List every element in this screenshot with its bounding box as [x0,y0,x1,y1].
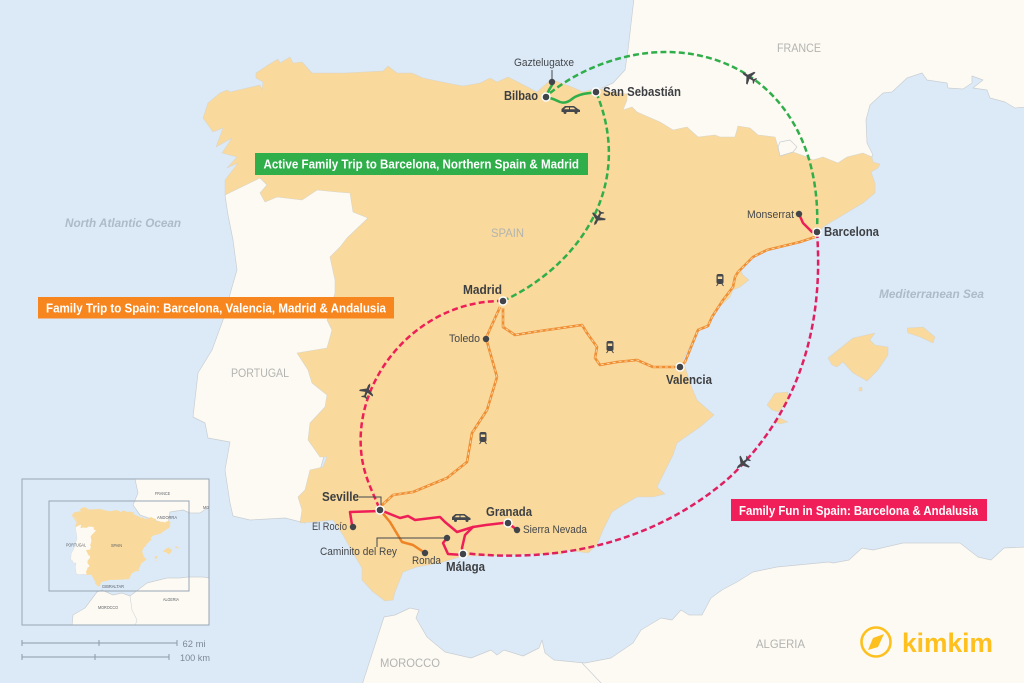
city labels: Caminito del Rey [320,546,397,558]
city labels: Valencia [666,372,713,387]
country labels [231,41,821,670]
scale bar: miles [22,639,206,649]
land: France [602,0,1024,180]
city labels: Madrid [463,282,502,297]
inset locator map [22,479,210,626]
city labels: Monserrat [747,209,794,221]
country labels: PORTUGAL [231,366,289,380]
inset locator map: FRANCE [155,491,170,496]
city labels: San Sebastián [603,84,681,99]
banner: Family Trip to Spain [38,297,394,318]
banner: Active Family Trip [255,153,588,175]
city labels: Bilbao [504,88,538,103]
city labels: Toledo [449,333,480,345]
route: green active family trip [503,52,817,301]
icon: trains [480,274,724,444]
scale bar: kilometres: 100 km [180,653,210,663]
sea label: North Atlantic Ocean: North Atlantic Ocean [65,216,181,230]
city labels: Barcelona [824,224,880,239]
inset locator map: MOROCCO [98,605,118,610]
logo: kimkim compass: kimkim [902,628,993,658]
inset locator map: ANDORRA [157,515,178,520]
scale bar: miles: 62 mi [182,639,206,649]
inset locator map: PORTUGAL [66,542,86,548]
city labels: El Rocío [312,521,347,533]
banner: Active Family Trip: Active Family Trip to Barcelona, Northern Spain & Madrid [264,156,579,172]
inset locator map: ALGERIA [163,597,180,602]
city labels: Málaga [446,559,486,574]
city labels: Sierra Nevada [523,524,588,536]
city labels: Gaztelugatxe [514,57,574,69]
icon: cars [452,106,580,522]
route: orange family trip rail [380,237,815,553]
logo: kimkim compass [862,628,993,658]
leader lines [359,70,552,547]
scale bar: kilometres [22,653,210,663]
banner: Family Fun in Spain: Family Fun in Spain: Barcelona & Andalusia [739,503,979,518]
country labels: SPAIN [491,226,524,240]
city labels: Seville [322,489,359,504]
land: North Africa [362,543,1024,683]
city labels: Granada [486,504,533,519]
land: Balearic Islands [767,327,935,424]
land: Portugal [193,175,370,523]
banner: Family Trip to Spain: Family Trip to Spain: Barcelona, Valencia, Madrid & Andalusia [46,300,387,316]
country labels: ALGERIA [756,637,805,651]
banner: Family Fun in Spain [731,499,987,521]
city labels [312,57,880,574]
icon: planes [357,67,759,474]
inset locator map: GIBRALTAR [102,584,125,589]
inset locator map: MO [203,505,209,510]
country labels: FRANCE [777,41,821,55]
sea label: Mediterranean Sea: Mediterranean Sea [879,287,984,301]
city labels: Ronda [412,555,442,567]
land: Andorra [778,140,797,156]
inset locator map: SPAIN [111,543,122,548]
city markers [350,79,821,558]
country labels: MOROCCO [380,656,440,670]
land: Spain [203,57,880,601]
route: red family fun trip [350,214,818,556]
